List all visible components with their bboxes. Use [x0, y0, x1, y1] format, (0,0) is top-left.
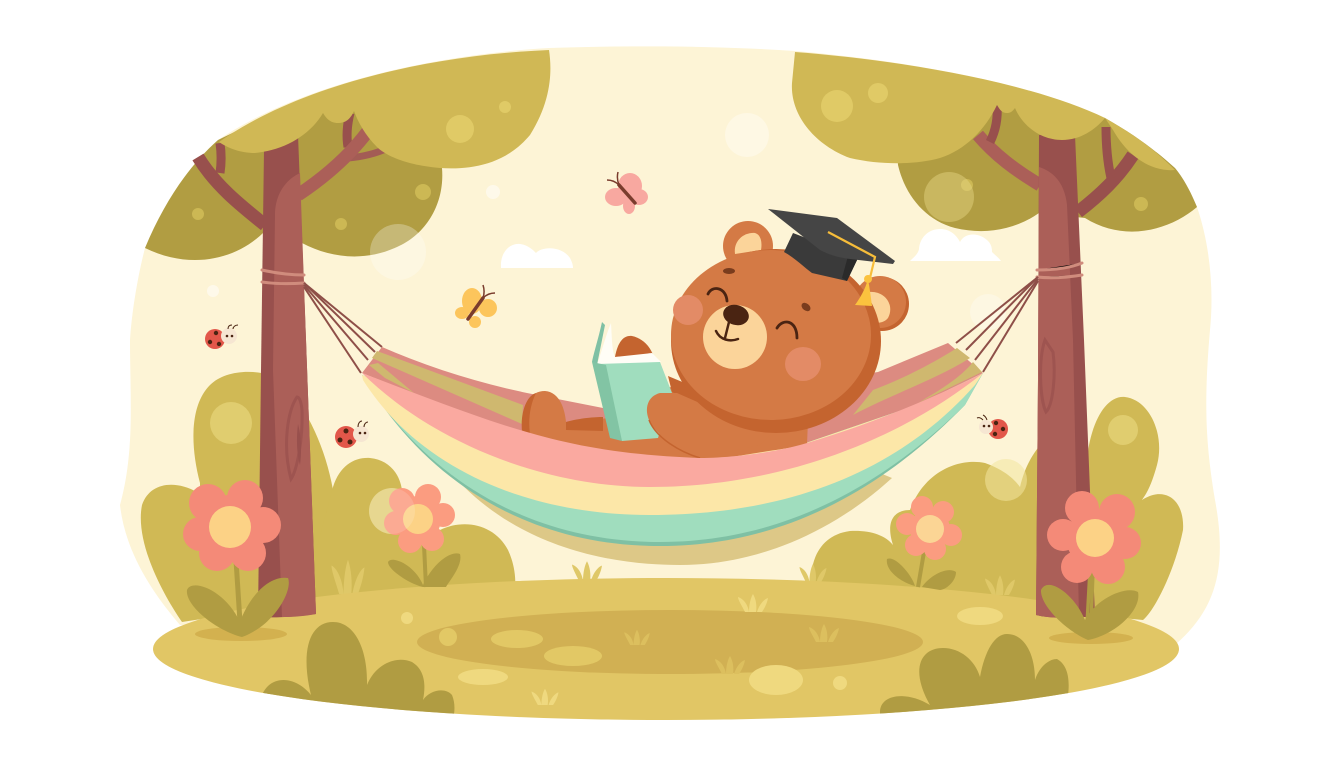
ladybug right: [977, 415, 1008, 439]
calf shade: [566, 417, 603, 431]
butterfly orange: [455, 285, 497, 328]
canopy left light: [219, 50, 550, 168]
ear right: [854, 276, 909, 331]
foot shade: [522, 393, 536, 434]
cover: [597, 362, 672, 441]
ladybug left: [205, 325, 238, 349]
cheek left: [673, 295, 703, 325]
ground puddle: [417, 610, 923, 674]
head: [671, 249, 881, 433]
hammock pink front: [362, 373, 983, 487]
head shade: [671, 249, 881, 433]
centre: [916, 515, 944, 543]
petals: [1047, 491, 1141, 584]
knot: [287, 397, 302, 479]
rope bands right: [1037, 263, 1082, 278]
ground spots: [439, 628, 602, 666]
stem: [236, 560, 240, 622]
book: [592, 322, 672, 441]
tassel cord: [828, 232, 875, 282]
leg: [522, 391, 700, 460]
background blob: [120, 46, 1220, 645]
trunk left: [258, 135, 316, 617]
bush right back: [811, 397, 1183, 620]
highlight: [369, 488, 415, 534]
tree right canopy dark: [895, 95, 1197, 232]
canopy right light: [792, 52, 1175, 170]
tree left canopy dark: [145, 100, 442, 260]
petals: [384, 484, 455, 553]
ropes left: [304, 283, 382, 373]
tree right: [978, 105, 1133, 618]
pages: [597, 323, 661, 365]
canopy bubbles: [370, 224, 426, 280]
arm: [647, 393, 780, 458]
leaves: [187, 578, 289, 637]
flower middle: [369, 484, 460, 587]
centre: [1076, 519, 1114, 557]
nose: [721, 302, 751, 328]
bear legs and feet: [522, 391, 700, 460]
muzzle: [703, 305, 767, 369]
mouth: [716, 322, 738, 340]
arm shade behind head: [668, 376, 727, 415]
stems: [1087, 570, 1093, 625]
petals: [183, 480, 281, 571]
ground grass tufts: [532, 594, 839, 705]
spine: [592, 362, 622, 441]
sun bubble upper centre: [725, 113, 769, 157]
cloud right: [910, 229, 1001, 261]
yellow stripe: [362, 373, 983, 515]
back fabric: [362, 343, 983, 458]
hammock shadow: [437, 440, 892, 565]
illustration: bear reading in hammock: [120, 46, 1220, 720]
foreground bush left: [263, 622, 454, 714]
canopy left spots: [446, 101, 511, 143]
green edge: [362, 373, 983, 546]
leaves: [887, 558, 956, 590]
bush left back: [141, 372, 515, 622]
butterfly pink: [605, 172, 648, 214]
petals: [896, 496, 962, 560]
arm shade line: [649, 420, 700, 458]
back stripes tan: [369, 348, 982, 424]
trunk right: [1036, 135, 1095, 618]
centre: [403, 504, 433, 534]
tree left: [198, 113, 388, 617]
foreground bush right: [880, 634, 1069, 714]
cap base: [784, 233, 858, 281]
leaves: [1041, 585, 1138, 640]
bush highlights: [210, 402, 1138, 445]
back cover: [592, 322, 605, 365]
canopy dots: [192, 179, 1148, 230]
graduation cap: [768, 209, 895, 306]
cap board: [768, 209, 895, 264]
ropes right: [956, 277, 1038, 372]
cheek right: [785, 347, 821, 381]
small bubbles: [207, 185, 1006, 330]
centre: [209, 506, 251, 548]
eye right: [777, 322, 797, 338]
hammock: [362, 343, 983, 565]
green stripe: [362, 373, 983, 542]
eyebrows: [723, 268, 812, 313]
branches left tree: [198, 113, 388, 225]
head main: [671, 250, 871, 420]
body: [600, 385, 808, 462]
eye left: [708, 289, 727, 301]
hand behind book: [615, 336, 653, 357]
leaves: [388, 553, 460, 587]
cloud left: [501, 244, 573, 268]
tassel: [855, 275, 872, 306]
back grass tufts: [332, 560, 1015, 595]
shadow: [1049, 632, 1133, 644]
ear left: [723, 221, 773, 271]
shadow: [195, 627, 287, 641]
ladybug middle: [335, 421, 369, 448]
canopy right spots: [821, 83, 888, 122]
flower right large: [1041, 491, 1141, 644]
flower left large: [183, 480, 289, 641]
ground: [153, 578, 1179, 720]
knot right: [1041, 340, 1054, 412]
rope bands: [262, 270, 304, 284]
flower right small: [887, 496, 962, 590]
branches right tree: [978, 105, 1133, 212]
